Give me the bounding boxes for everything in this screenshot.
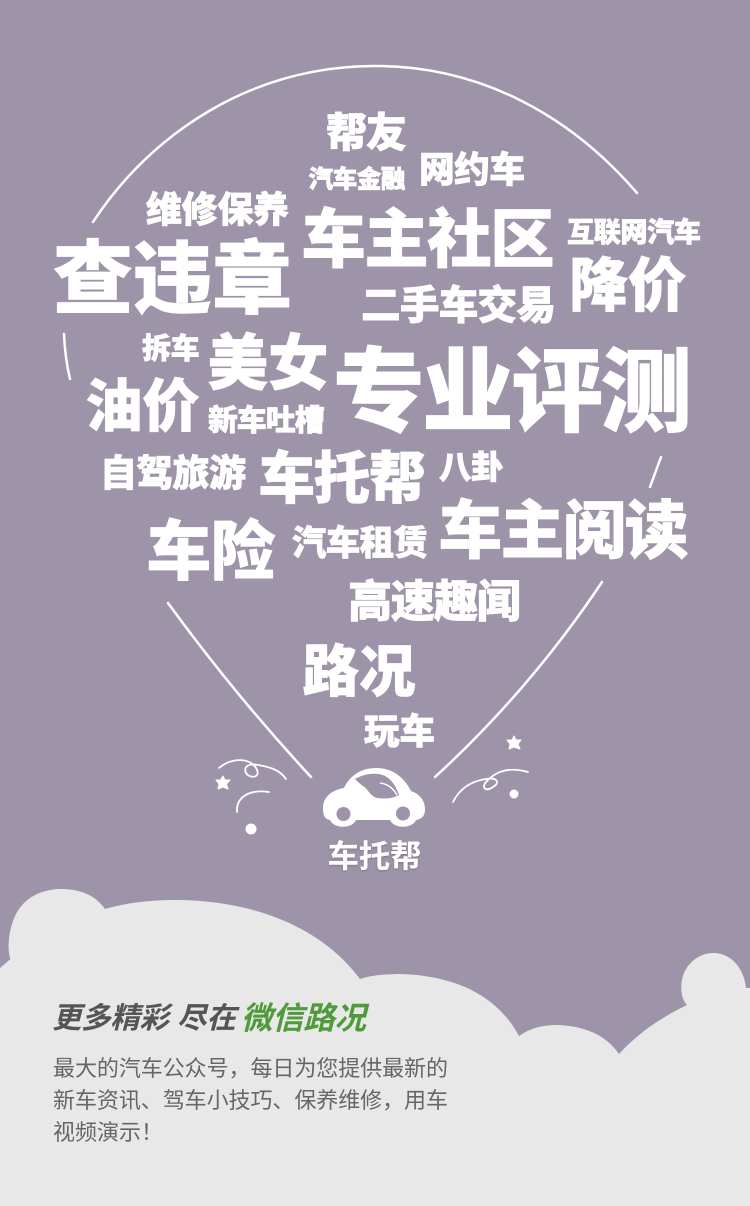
word cloud: 互联网汽车 [567, 216, 701, 248]
cloud body text: 最大的汽车公众号，每日为您提供最新的 [53, 1056, 448, 1081]
word cloud: 帮友 [326, 110, 407, 156]
icon: star left [216, 776, 230, 789]
word cloud: 车险 [146, 515, 276, 588]
icon: star right [507, 736, 521, 749]
cloud heading: 微信路况 [241, 1000, 369, 1036]
word cloud: 车主阅读 [438, 496, 688, 567]
word cloud: 车托帮 [258, 447, 426, 510]
word cloud: 新车吐槽 [208, 404, 325, 438]
word cloud: 降价 [570, 254, 686, 319]
cloud heading: 尽在 [177, 1002, 240, 1035]
dot right [510, 790, 518, 798]
cloud heading [52, 1000, 369, 1036]
word cloud: 维修保养 [146, 189, 289, 230]
word cloud: 二手车交易 [361, 283, 556, 328]
word cloud: 路况 [302, 640, 416, 703]
word cloud: 八卦 [439, 450, 504, 486]
word cloud: 油价 [86, 375, 200, 439]
cloud body text [53, 1056, 448, 1145]
word cloud: 汽车金融 [308, 164, 406, 194]
word cloud: 美女 [208, 329, 328, 397]
cloud heading: 更多精彩 [52, 1002, 173, 1035]
cloud body text: 新车资讯、驾车小技巧、保养维修，用车 [53, 1088, 448, 1113]
word cloud: 拆车 [142, 332, 200, 366]
word cloud: 专业评测 [333, 342, 692, 444]
icon: car logo [323, 768, 425, 827]
word cloud [53, 110, 701, 752]
confetti right [453, 770, 528, 802]
word cloud: 查违章 [53, 235, 292, 324]
brand name: 车托帮 [328, 838, 422, 874]
dot left [246, 824, 256, 834]
word cloud: 汽车租赁 [292, 524, 428, 563]
word cloud: 玩车 [364, 712, 435, 752]
word cloud: 网约车 [419, 150, 525, 190]
confetti left [219, 760, 286, 812]
word cloud: 高速趣闻 [348, 578, 521, 627]
balloon outline [64, 66, 661, 777]
word cloud: 自驾旅游 [100, 452, 246, 494]
cloud panel [0, 889, 750, 1206]
word cloud: 车主社区 [302, 204, 554, 276]
cloud body text: 视频演示！ [53, 1120, 163, 1145]
